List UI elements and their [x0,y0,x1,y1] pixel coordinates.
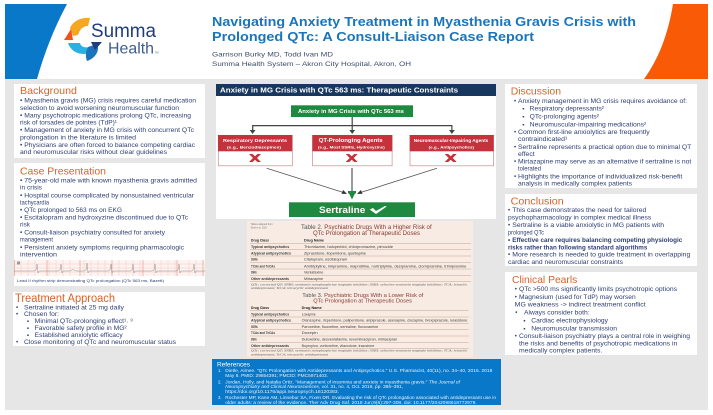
diagram heading bar [216,84,496,96]
panel: clinical pearls: Cardiac electrophysiology [531,318,609,325]
panel: treatment approach: ▪ [27,325,29,332]
panel: conclusion: • [508,207,510,214]
panel: clinical pearls: Consult-liaison psychiatry plays a central role in weighing [519,333,690,340]
panel: discussion: QTc-prolonging agents² [530,114,599,121]
authors and affiliation: Garrison Burky MD, Todd Ivan MD [212,52,333,58]
table 2: Atypical antipsychotics [251,251,291,255]
table 3: Duloxetine, desvenlafaxine, levomilnacipran, milnacipran [302,338,397,342]
panel: case presentation: • Persistent anxiety symptoms requiring pharmacologic [20,245,184,252]
panel: case presentation: Lead II rhythm strip demonstrating QTc prolongation (QTc 563 ms, Bazett) [17,278,165,283]
top green box [291,105,413,117]
panel: case presentation: • 75-year-old male with known myasthenia gravis admitted [20,177,197,184]
table 3: Doxepin [302,331,318,335]
branching arrows [250,117,455,134]
panel: case presentation: Case Presentation [20,166,106,178]
panel: background: • Physicians are often forced to balance competing cardiac [20,142,195,149]
icon: red X [346,154,358,162]
table 2: TCAs and TeCAs [251,264,275,268]
panel: discussion: contraindicated¹ [518,136,567,143]
panel: treatment approach: ▪ [27,332,29,339]
panel: clinical pearls: • [515,286,517,293]
icon: pinwheel logo mark [64,18,102,61]
panel: discussion: • [514,144,516,151]
table 3: Table 3. Psychiatric Drugs With a Lower Risk of [302,293,424,299]
panel: treatment approach: Favorable safety profile in MG² [35,325,127,332]
panel: discussion: Mirtazapine may serve as an alternative if sertraline is not [518,159,692,166]
panel: case presentation: • Hospital course complicated by nonsustained ventricular [20,192,194,199]
panel: treatment approach: • [16,311,18,318]
panel: references: 2. [218,380,222,384]
table 3: QTc: corrected QT; SNRI: serotonin norepinephrine reuptake inhibitor; SSRI: selective serotonin reuptake inhibitor; TCA: tricyclic [251,349,468,353]
table 2: Mirtazapine [304,277,323,281]
table 3: Typical antipsychotics [251,312,289,316]
panel: background: selection to avoid worsening neuromuscular function [20,105,179,112]
panel: conclusion: risks rather than following standard algorithms [508,244,648,251]
panel: case presentation: risk [20,222,31,229]
table 2: antidepressant; TeCA: tetracyclic antidepressant [251,286,328,290]
panel: background: • Many psychotropic medications prolong QTc, increasing [20,112,191,119]
panel: discussion: Anxiety management in MG crisis requires avoidance of: [518,98,687,105]
table 2: QTc Prolongation at Therapeutic Doses [313,230,420,237]
table 2: Citalopram, escitalopram [304,258,347,262]
table 2: QTc: corrected QT; SNRI: serotonin norepinephrine reuptake inhibitor; SSRI: selective serotonin reuptake inhibitor; TCA: tricyclic [251,282,468,286]
panel: conclusion: prolonged QTc [508,229,544,236]
table source note [251,222,273,230]
authors and affiliation [212,52,411,68]
box: respiratory depressants: (e.g., Benzodiazepines) [227,144,282,150]
box: respiratory depressants: Respiratory Depressants [223,138,287,144]
table 3: Drug Name [302,306,322,310]
panel: treatment approach: Established anxiolytic efficacy [35,332,124,339]
table 2: Ziprasidone, iloperidone, quetiapine [304,251,366,255]
panel: clinical pearls: ▪ [523,325,525,332]
panel: discussion: ▪ [522,106,524,113]
panel: case presentation: • QTc prolonged to 563 ms on EKG [20,207,122,214]
table 2: Table 2. Psychiatric Drugs With a Higher Risk of [301,224,432,231]
panel: discussion: analysis in medically complex patients [518,180,632,187]
panel: discussion: • [514,98,516,105]
panel: conclusion: Effective care requires balancing competing physiologic [512,237,683,244]
panel: clinical pearls: MG weakness -> indirect treatment conflict [515,302,646,309]
table 2: Venlafaxine [304,271,323,275]
box: neuromuscular-impairing agents: (e.g., Antipsychotics) [429,144,475,150]
table 2: SNRIs [251,271,257,275]
table 3: SSRIs [251,325,258,329]
panel: treatment approach: Close monitoring of QTc and neuromuscular status [24,339,176,346]
panel: references [212,359,501,405]
panel: references: Neuropsychiatry and Clinical Neurosciences , vol. 31, no. 4, Oct. 2019, pp. 386–391, [225,384,403,389]
panel: background: prolongation in the literature is limited [20,134,136,141]
panel: conclusion: Conclusion [511,196,564,208]
box: respiratory depressants [218,135,292,166]
table 2: Other antidepressants [251,277,289,281]
header orange corner shape [644,4,708,79]
box: QT-prolonging agents: QT-Prolonging Agents [319,138,383,144]
panel: conclusion: This case demonstrates the need for tailored [512,207,646,214]
panel: case presentation: management [20,237,53,244]
sertraline result box [289,202,415,217]
panel: references: References [217,361,251,368]
logo: Summa Health: Summa [91,21,156,42]
table 3: QTc Prolongation at Therapeutic Doses [313,298,412,304]
logo: Summa Health: Health [108,40,154,58]
panel: conclusion: • [508,237,510,244]
panel: conclusion: • [508,222,510,229]
table 3: antidepressant; TeCA: tetracyclic antidepressant [251,352,328,356]
table 3: Bupropion, vortioxetine, vilazodone, trazodone [302,344,374,348]
panel: discussion: ▪ [522,114,524,121]
panel: background: and neuromuscular risks without clear guidelines [20,149,167,156]
table 2: Typical antipsychotics [251,245,289,249]
panel: discussion: Highlights the importance of individualized risk-benefit [518,173,683,180]
table 3 [250,293,469,356]
table 3: Other antidepressants [251,344,289,348]
title: Prolonged QTc: A Consult-Liaison Case Report [212,29,535,44]
panel: clinical pearls: QTc >500 ms significantly limits psychotropic options [519,286,677,293]
panel: references: older adults: a review of the evidence. Ther Adv Drug Saf. 2018 Jun;9(6):297-308. doi: 10.1177/2042098618772979. [225,400,477,405]
panel: discussion: Neuromuscular-impairing medications² [530,121,646,128]
panel: discussion: tolerated [518,166,541,173]
panel: treatment approach [13,292,205,346]
panel: discussion: Sertraline represents a practical option due to minimal QT [518,144,692,151]
panel: drug tables [247,221,473,357]
icon: red X [445,154,457,162]
sertraline result box: Sertraline [319,205,365,215]
diagram heading bar: Anxiety in MG Crisis with QTc 563 ms: Therapeutic Constraints [220,88,458,95]
box: neuromuscular-impairing agents: Neuromuscular-Impairing Agents [414,138,489,144]
box: QT-prolonging agents [312,135,392,166]
panel: clinical pearls: medically complex patients. [519,347,603,354]
panel: treatment approach: • [16,339,18,346]
panel: treatment approach: Chosen for: [24,311,59,318]
panel: clinical pearls [505,272,697,355]
panel: case presentation: • Escitalopram and hydroxyzine discontinued due to QTc [20,215,188,222]
table 2: Drug Class [251,238,269,242]
panel: background: • Management of anxiety in MG crisis with concurrent QTc [20,127,194,134]
table 3: SNRIs [251,338,257,342]
panel: conclusion: psychopharmacology in complex medical illness [508,214,651,221]
panel: background: risk of torsades de pointes (TdP)¹ [20,120,117,127]
panel: discussion: • [514,129,516,136]
panel: conclusion: cardiac and neuromuscular constraints [508,259,623,266]
panel: clinical pearls: Clinical Pearls [512,274,577,286]
panel: discussion: Discussion [511,86,561,98]
panel: clinical pearls: Always consider both: [524,310,590,317]
panel: treatment approach: ▪ [27,318,29,325]
table 3: Loxapine [302,312,316,316]
panel: treatment approach: • [16,304,18,311]
panel: discussion: ▪ [522,121,524,128]
panel: treatment approach: Minimal QTc-prolonging effect¹˒ ³ [35,318,133,325]
panel: clinical pearls: ▪ [523,318,525,325]
panel: references: Dietle, Aimee. "QTc Prolongation with Antidepressants and Antipsychotics." U.S. Pharmacist, 40(11), no. 34–40, 2015. 2018 [225,368,493,373]
table 2: Thioridazine, haloperidol, chlorpromazine, pimozide [304,245,393,249]
panel: background: • Myasthenia gravis (MG) crisis requires careful medication [20,98,196,105]
panel: background [14,84,205,158]
panel: background: Background [20,85,77,97]
panel: clinical pearls: Magnesium (used for TdP) may worsen [519,294,636,301]
table 3: TCAs and TeCAs [251,331,275,335]
table 2: SSRIs [251,258,258,262]
panel: discussion: Respiratory depressants² [530,106,604,113]
header blue corner shape [5,4,67,79]
poster background panel [5,79,708,410]
panel: discussion: • [514,159,516,166]
table source note: Tables adapted from [251,222,273,226]
logo: Summa Health [64,18,159,61]
icon: red X [249,154,261,162]
table 3: Paroxetine, fluoxetine, sertraline, fluvoxamine [302,325,378,329]
panel: references: May 8. PMID: 29854391; PMCID: PMC5971403. [225,373,328,378]
panel: clinical pearls: • [515,333,517,340]
panel: case presentation: • Consult-liaison psychiatry consulted for anxiety [20,230,166,237]
table 2: Amitriptyline, imipramine, maprotiline, nortriptyline, desipramine, clomipramine, trimipramine [304,264,466,268]
panel: conclusion: More research is needed to guide treatment in overlapping [512,252,690,259]
authors and affiliation: Summa Health System – Akron City Hospital, Akron, OH [212,61,411,68]
panel: case presentation [14,163,205,286]
title [212,14,636,44]
table 3: Olanzapine, risperidone, paliperidone, aripiprazole, asenapine, clozapine, brexpiprazole, lurasidone [302,319,467,323]
box: neuromuscular-impairing agents [410,135,494,166]
table 2: Drug Name [304,238,324,242]
converging arrows [267,168,437,200]
panel: clinical pearls: Neuromuscular transmission [531,325,617,332]
panel: discussion [505,84,697,188]
logo: Summa Health: TM [155,52,159,54]
table 3: Atypical antipsychotics [251,319,291,323]
panel: clinical pearls: • [515,310,517,317]
icon: check mark [370,206,387,214]
panel: conclusion: Sertraline is a viable anxiolytic in MG patients with [512,222,664,229]
box: QT-prolonging agents: (e.g., Most SSRIs, Hydroxyzine) [318,144,385,150]
panel: treatment approach: Sertraline initiated at 25 mg daily [24,304,125,311]
panel: treatment approach: Treatment Approach [15,293,115,305]
panel: discussion: effect [518,151,535,158]
panel: case presentation: intervention [20,251,57,258]
ECG rhythm strip [14,260,205,276]
panel: references: Rochester MP, Kane AM, Linnebur SA, Fixen DR. Evaluating the risk of QTc prolongation associated with antidepressant use in [225,395,497,400]
table source note: Dietle et al., 2015 [251,226,267,230]
panel: references: 1. [218,368,222,373]
panel: references: Jordan, Holly, and Natalia Ortiz. "Management of insomnia and anxiety in myasthenia gravis." The Journal of [225,380,461,384]
panel: case presentation: in crisis [20,184,42,191]
table 2 [250,224,471,290]
panel: references: 3. [218,395,222,400]
panel: conclusion [505,194,697,266]
panel: conclusion: • [508,252,510,259]
panel: discussion: • [514,173,516,180]
top green box: Anxiety in MG Crisis with QTc 563 ms [298,109,404,115]
title: Navigating Anxiety Treatment in Myasthenia Gravis Crisis with [212,14,636,29]
panel: clinical pearls: • [515,294,517,301]
panel: case presentation: tachycardia [20,199,50,206]
panel: references: https://doi.org/10.1176/appi.neuropsych.18120383. [225,389,339,394]
panel: clinical pearls: the risks and benefits of psychotropic medications in [519,340,677,347]
panel: therapeutic constraints diagram [216,84,496,219]
table 3: Drug Class [251,306,269,310]
panel: discussion: Common first-line anxiolytics are frequently [518,129,651,136]
